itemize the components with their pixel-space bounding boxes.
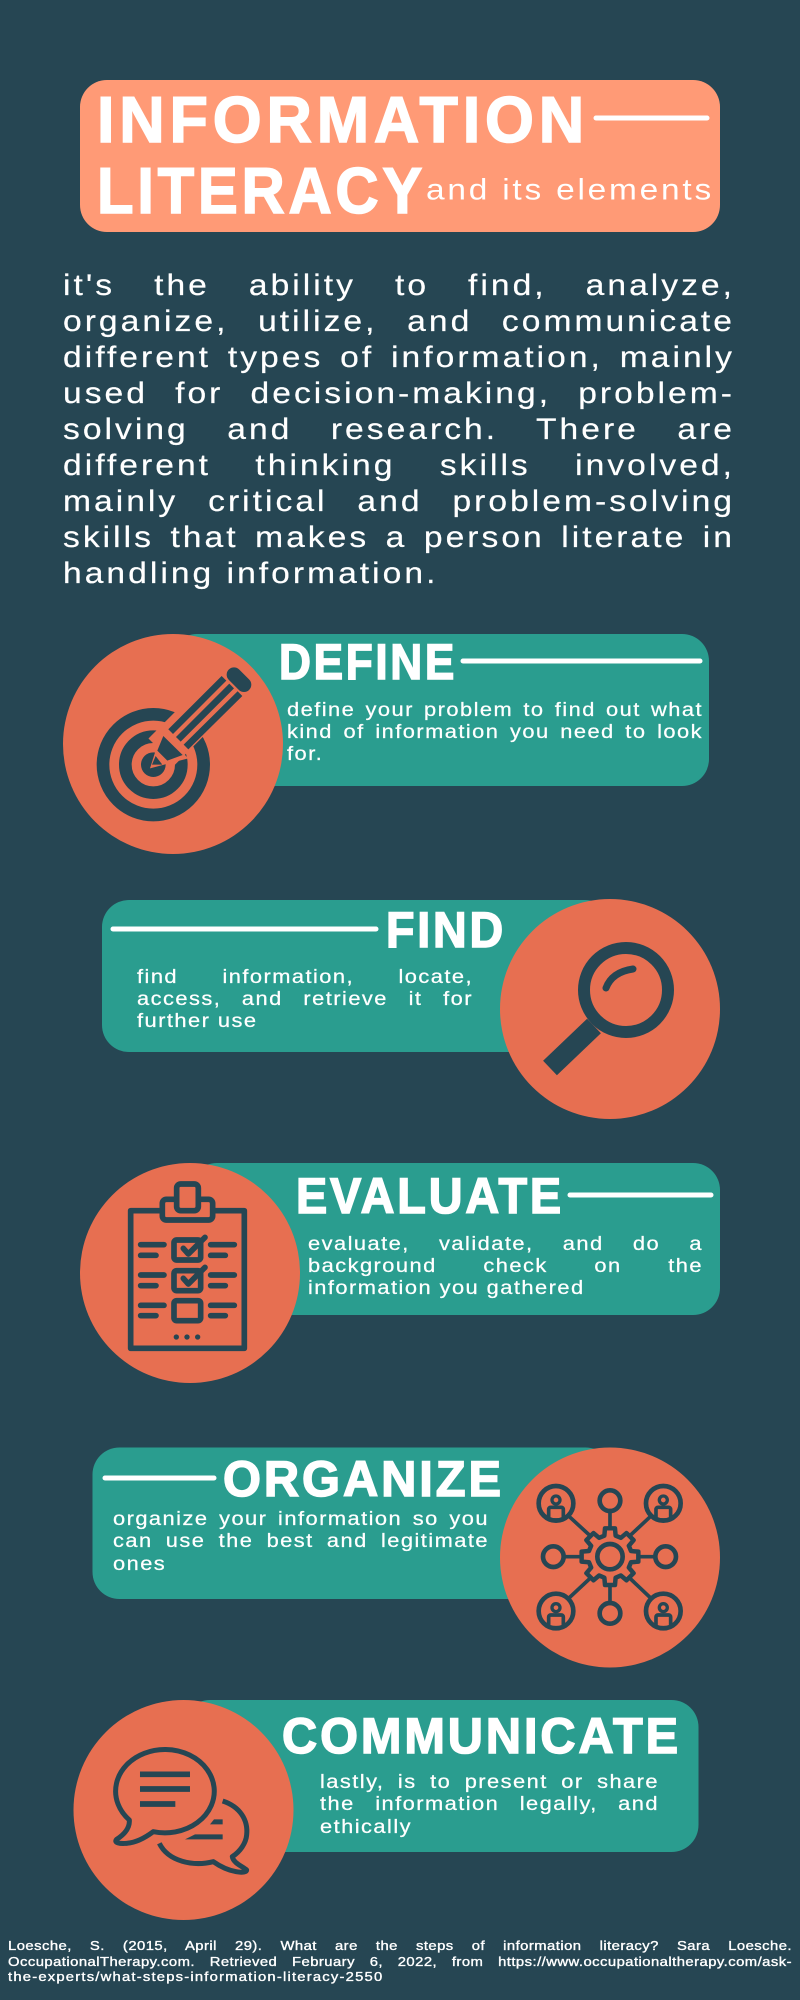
title banner: INFORMATION (97, 83, 589, 156)
description: find: find information, locate, (137, 966, 473, 988)
intro paragraph: different thinking skills involved, (63, 449, 735, 482)
intro paragraph: mainly critical and problem-solving (63, 485, 735, 518)
description: organize: can use the best and legitimate (113, 1530, 489, 1552)
description: define (287, 698, 703, 764)
intro paragraph: used for decision-making, problem- (63, 377, 735, 410)
intro paragraph: handling information. (63, 557, 438, 590)
icon: target and pencil (103, 675, 244, 815)
description: find: further use (137, 1010, 257, 1032)
description: communicate: ethically (320, 1816, 412, 1838)
panel: find (102, 899, 720, 1119)
icon: magnifying glass (550, 948, 668, 1068)
panel: communicate (74, 1700, 698, 1920)
intro paragraph: skills that makes a person literate in (63, 521, 735, 554)
description: organize: ones (113, 1552, 166, 1574)
icon: clipboard checklist (131, 1184, 244, 1348)
panel: communicate: COMMUNICATE (282, 1708, 681, 1764)
panel: evaluate: EVALUATE (296, 1168, 564, 1224)
description: organize (113, 1508, 489, 1574)
panel: define: DEFINE (279, 634, 457, 690)
citation (8, 1938, 792, 1984)
description: communicate (320, 1770, 659, 1838)
citation: OccupationalTherapy.com. Retrieved February 6, 2022, from https://www.occupationaltherapy.com/ask- (8, 1954, 792, 1968)
description: find (137, 966, 473, 1032)
panel: organize (92, 1448, 720, 1668)
intro paragraph: different types of information, mainly (63, 341, 735, 374)
description: communicate: lastly, is to present or share (320, 1770, 659, 1792)
description: define: for. (287, 742, 323, 764)
citation: the-experts/what-steps-information-literacy-2550 (8, 1969, 383, 1984)
citation: Loesche, S. (2015, April 29). What are the steps of information literacy? Sara Loesche. (8, 1938, 792, 1953)
description: find: access, and retrieve it for (137, 988, 473, 1010)
description: define: define your problem to find out what (287, 698, 703, 720)
description: evaluate (308, 1232, 703, 1298)
intro paragraph: organize, utilize, and communicate (63, 305, 735, 338)
panel: find: FIND (386, 902, 506, 958)
icon: network gear (539, 1486, 681, 1628)
panel: define (63, 634, 709, 854)
panel: evaluate (80, 1163, 720, 1383)
title banner: LITERACY (97, 154, 426, 227)
title banner: and its elements (426, 174, 714, 206)
description: organize: organize your information so you (113, 1508, 489, 1530)
description: evaluate: information you gathered (308, 1276, 585, 1298)
panel: organize: ORGANIZE (223, 1451, 504, 1507)
description: communicate: the information legally, and (320, 1793, 659, 1815)
description: define: kind of information you need to look (287, 720, 703, 742)
title banner (80, 80, 720, 232)
intro paragraph: it's the ability to find, analyze, (63, 269, 735, 302)
intro paragraph (63, 269, 735, 590)
description: evaluate: background check on the (308, 1254, 703, 1276)
icon: speech bubbles (116, 1750, 247, 1872)
description: evaluate: evaluate, validate, and do a (308, 1232, 703, 1254)
intro paragraph: solving and research. There are (63, 413, 735, 446)
